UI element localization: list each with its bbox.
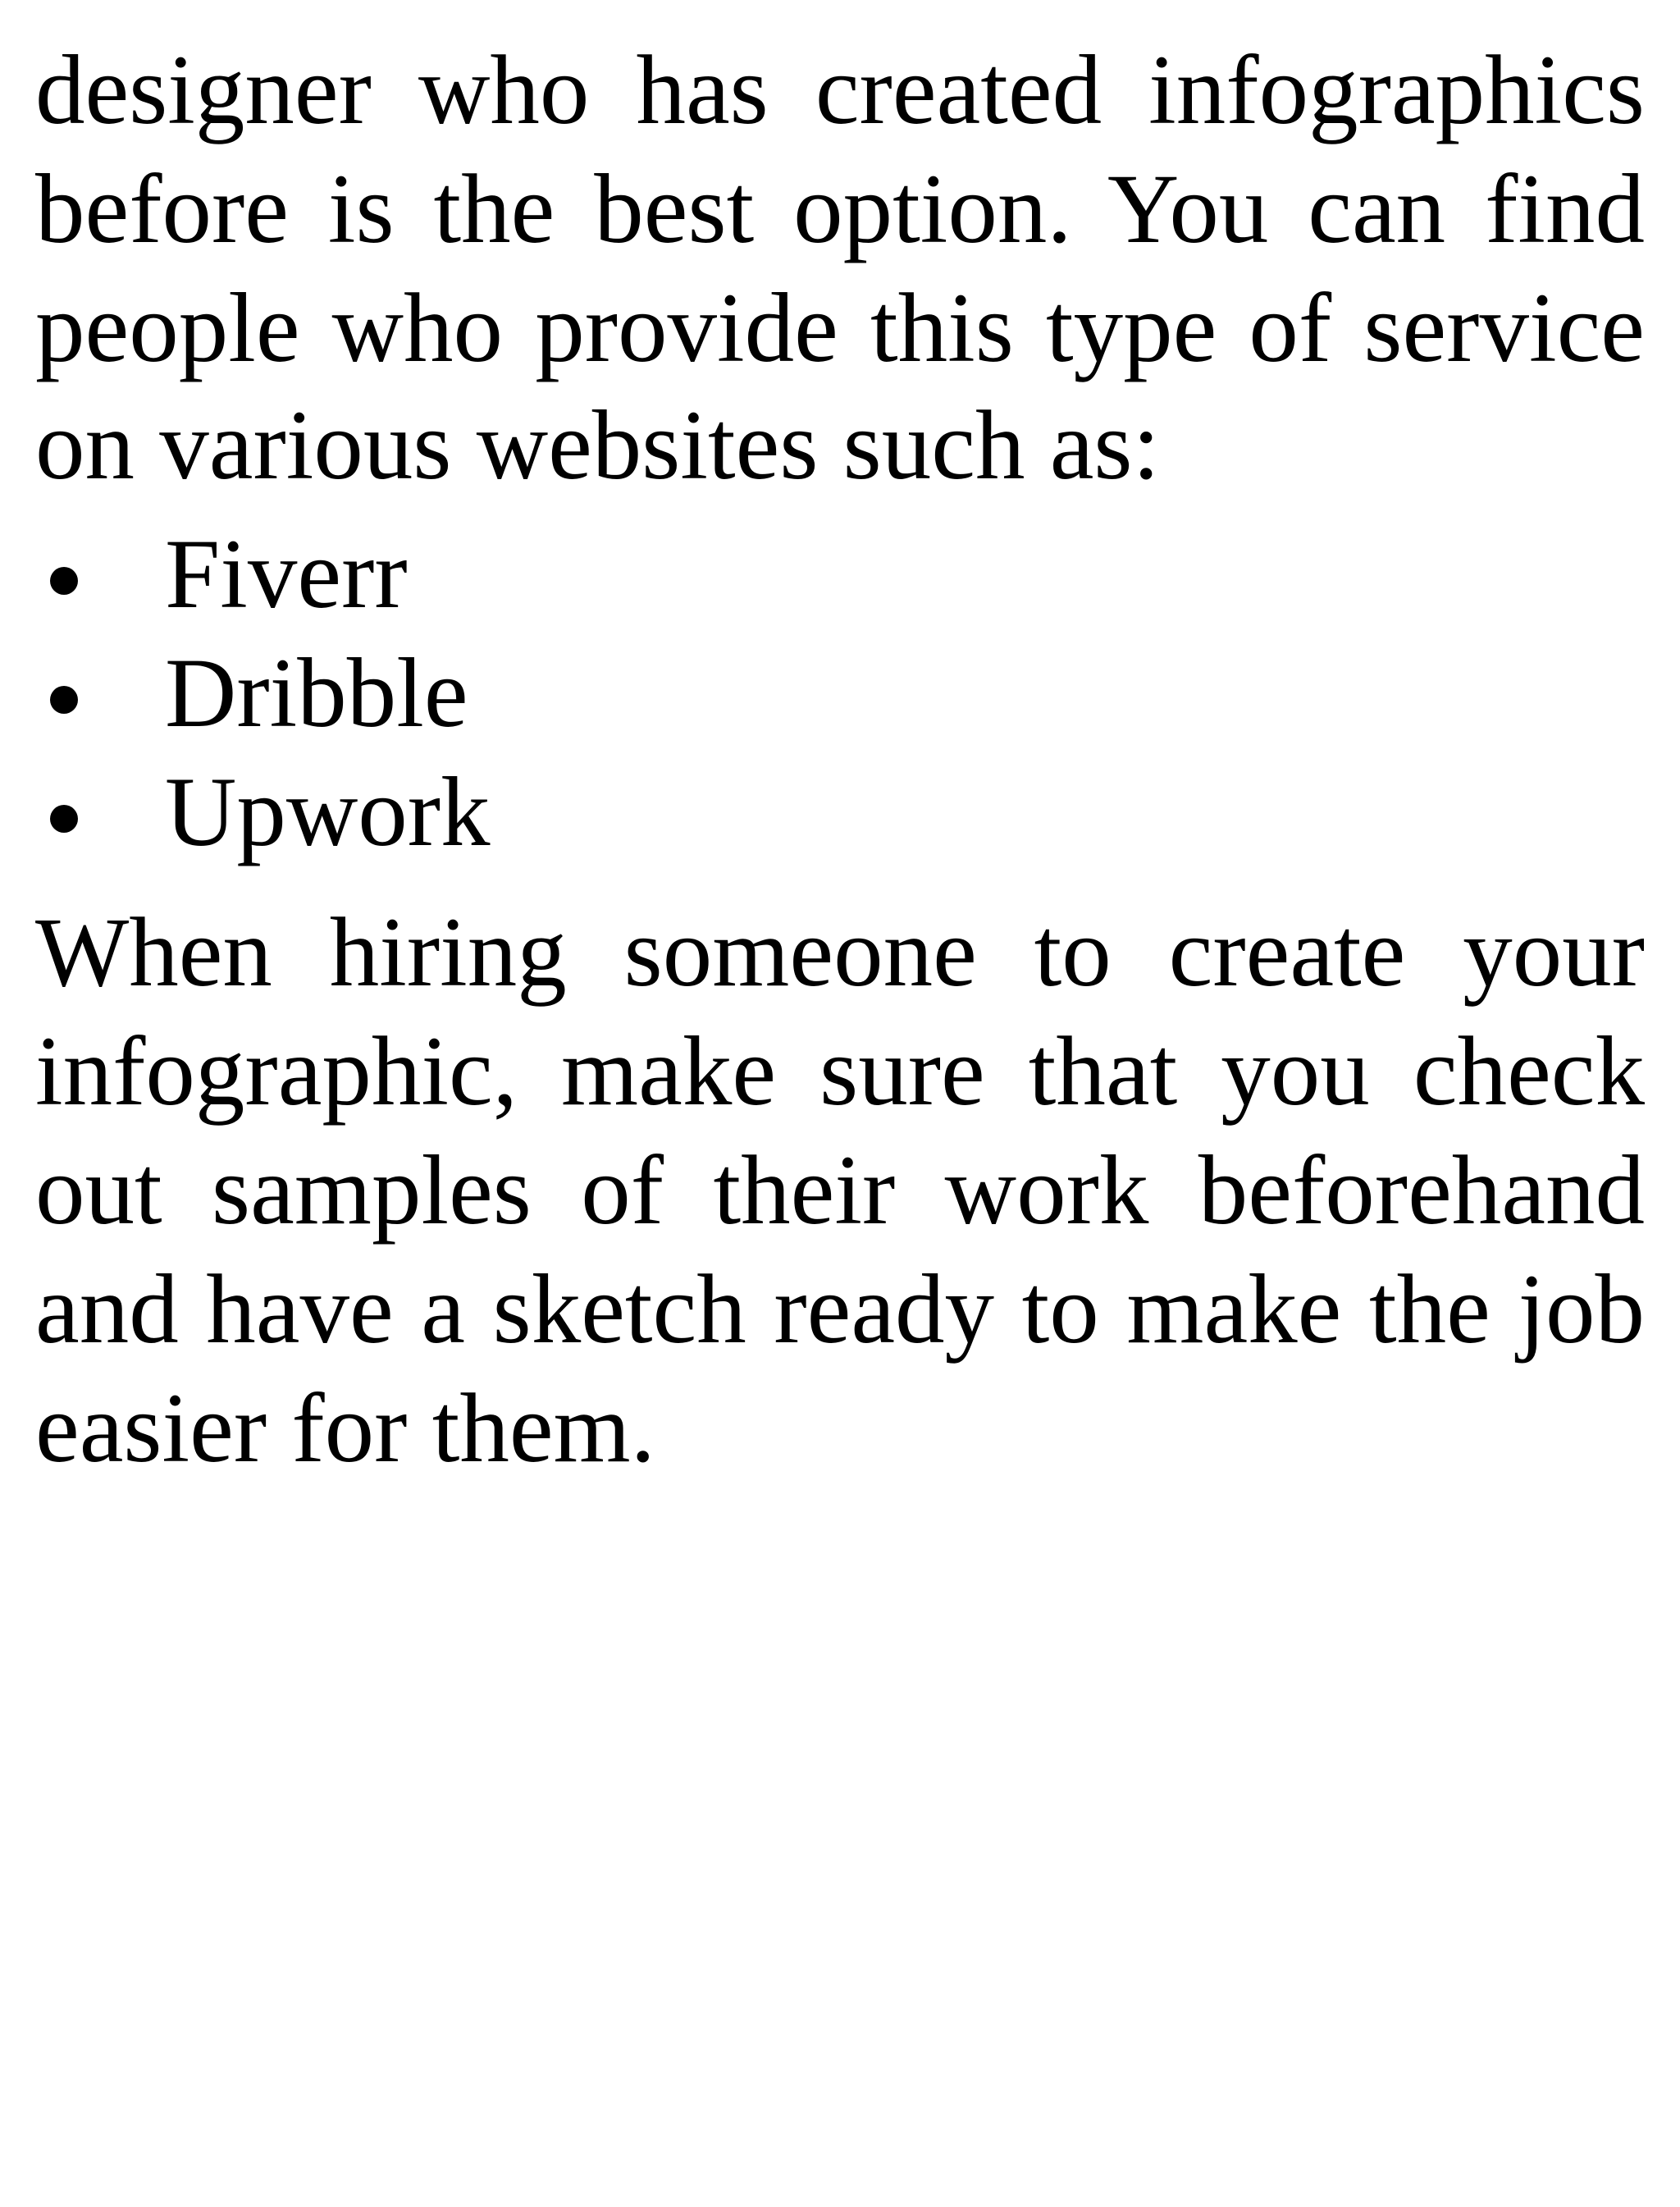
text block: hiring advice paragraph: out samples of their work beforehand [35,1135,1645,1245]
text block: hiring advice paragraph: and have a sketch ready to make the job [35,1254,1645,1364]
bullet list: websites [50,519,491,867]
text block: hiring advice paragraph: easier for them. [35,1373,655,1483]
text block: hiring advice paragraph [35,898,1645,1483]
bullet list: websites: Fiverr [165,519,408,629]
bullet list: websites: Upwork [165,757,491,867]
text block: intro paragraph: designer who has created infographics [35,35,1645,145]
bullet list: websites: Dribble [165,638,468,748]
text block: intro paragraph: people who provide this type of service [35,273,1645,383]
text block: intro paragraph [35,35,1645,500]
text block: intro paragraph: on various websites such as: [35,391,1160,500]
text block: hiring advice paragraph: infographic, make sure that you check [35,1017,1645,1126]
text block: intro paragraph: before is the best option. You can find [35,154,1645,264]
text block: hiring advice paragraph: When hiring someone to create your [35,898,1645,1008]
